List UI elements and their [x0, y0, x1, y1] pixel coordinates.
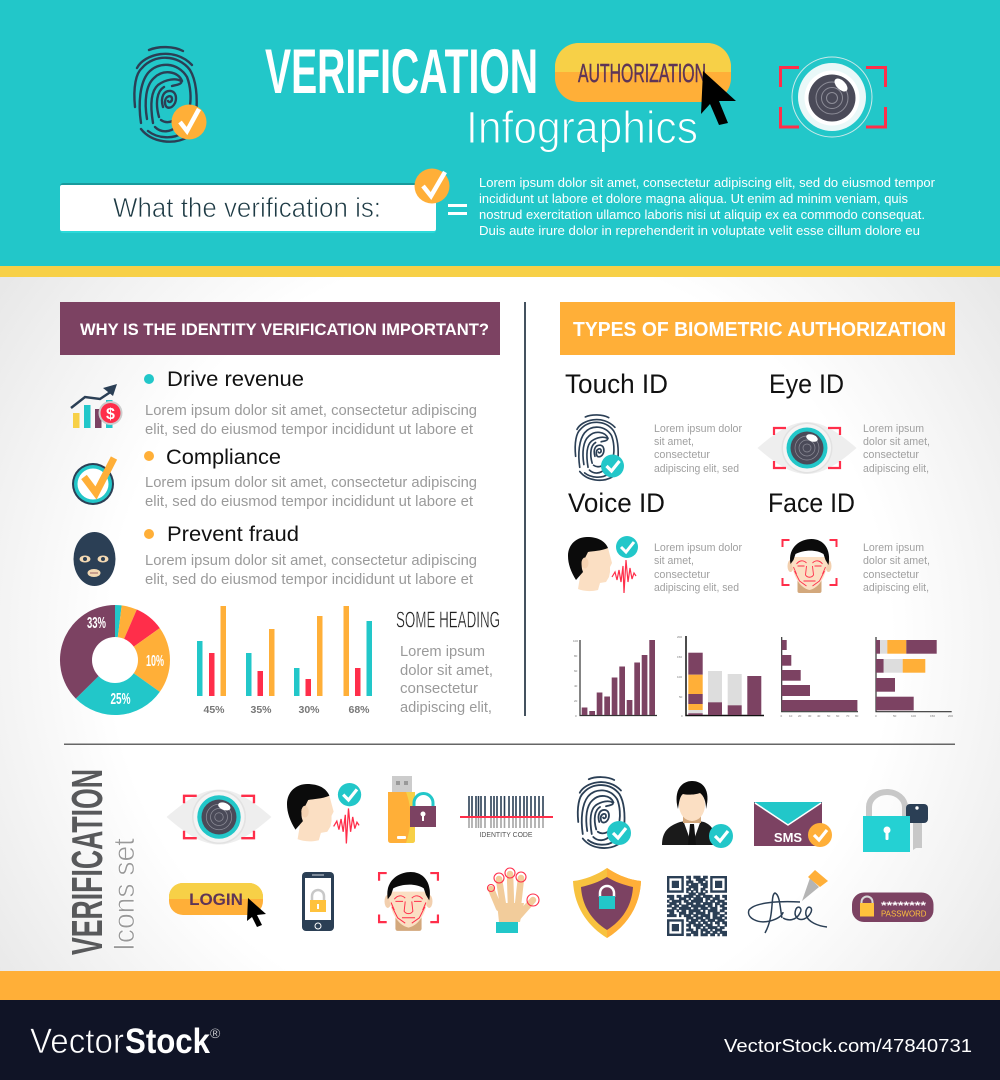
what the verification is box: What the verification is: [113, 192, 381, 223]
item: compliance: elit, sed do eiusmod tempor incididunt ut labore et [145, 493, 474, 510]
item: compliance [144, 446, 477, 510]
biometric: face id: consectetur [863, 569, 919, 581]
footer logo [30, 1022, 221, 1061]
chart: vertical bars: 80 [574, 654, 578, 658]
icon: face scan [379, 872, 438, 931]
grouped bar chart: 30% [298, 704, 320, 716]
heading: types of biometric authorization [560, 302, 955, 355]
header description text: nostrud exercitation ullamco laboris nisi ut aliquip ex ea commodo consequat. [479, 208, 925, 222]
icon: padlock with key [863, 792, 928, 852]
grouped bar chart [197, 606, 372, 716]
donut chart: 10% [146, 653, 164, 670]
authorization button [555, 43, 731, 102]
item: drive revenue: elit, sed do eiusmod tempor incididunt ut labore et [145, 421, 474, 438]
donut chart [60, 605, 170, 715]
biometric: eye id: dolor sit amet, [863, 436, 930, 448]
biometric: touch id: sit amet, [654, 436, 694, 448]
chart: stacked horizontal bars: 200 [948, 714, 953, 718]
icon: header camera eye target [780, 57, 886, 137]
heading: why is identity verification important [60, 302, 500, 355]
chart: stacked horizontal bars: 0 [875, 714, 877, 718]
footer logo: ® [210, 1025, 221, 1041]
subtitle: infographics: Infographics [466, 102, 698, 153]
chart: horizontal bars: 30 [808, 714, 812, 718]
icon: usb key with padlock [388, 776, 436, 843]
item: prevent fraud: Lorem ipsum dolor sit amet, consectetur adipiscing [145, 552, 477, 569]
chart: stacked horizontal bars: 100 [911, 714, 916, 718]
icon: qr code [667, 876, 727, 936]
footer logo: Vector [30, 1022, 124, 1061]
biometric: face id: dolor sit amet, [863, 555, 930, 567]
chart: stacked horizontal bars [875, 637, 953, 718]
chart: vertical bars: 100 [573, 639, 578, 643]
authorization button: AUTHORIZATION [578, 58, 706, 88]
some heading text block: Lorem ipsum [400, 643, 485, 660]
chart: stacked columns: 150 [677, 655, 682, 659]
chart: horizontal bars: 70 [846, 714, 850, 718]
grouped bar chart: 35% [250, 704, 272, 716]
chart: horizontal bars: 80 [855, 714, 859, 718]
what the verification is box [60, 168, 450, 233]
heading: types of biometric authorization: TYPES OF BIOMETRIC AUTHORIZATION [573, 319, 946, 341]
title: verification: VERIFICATION [265, 37, 538, 107]
chart: stacked horizontal bars: 50 [893, 714, 897, 718]
item: compliance: Compliance [166, 446, 281, 469]
chart: stacked columns: 50 [679, 695, 683, 699]
biometric: touch id [565, 369, 742, 480]
icon: voice recognition head [287, 783, 361, 843]
icon: compliance check [72, 458, 114, 505]
icon: password pill: ******** [881, 900, 927, 912]
some heading text block: dolor sit amet, [400, 662, 493, 679]
item: compliance: Lorem ipsum dolor sit amet, consectetur adipiscing [145, 474, 477, 491]
header description text [479, 176, 935, 238]
chart: horizontal bars: 60 [836, 714, 840, 718]
icon: hand with fingertip marks [488, 868, 539, 933]
heading: why is identity verification important: WHY IS THE IDENTITY VERIFICATION IMPORTANT? [80, 320, 489, 339]
icon: sms envelope: SMS [774, 830, 802, 845]
icons set vertical title: VERIFICATION [63, 769, 112, 955]
biometric: eye id [758, 369, 930, 475]
icon: password pill: PASSWORD [881, 908, 926, 918]
biometric: eye id: adipiscing elit, [863, 463, 929, 475]
header description text: incididunt ut labore et dolore magna aliqua. Ut enim ad minim veniam, quis [479, 192, 908, 206]
item: drive revenue: Lorem ipsum dolor sit amet, consectetur adipiscing [145, 402, 477, 419]
item: prevent fraud [144, 523, 477, 588]
chart: vertical bars: 20 [574, 699, 578, 703]
item: prevent fraud: elit, sed do eiusmod tempor incididunt ut labore et [145, 571, 474, 588]
biometric: face id: Lorem ipsum [863, 542, 924, 554]
biometric: voice id: sit amet, [654, 555, 694, 567]
donut chart: 33% [87, 615, 106, 632]
header band [0, 0, 1000, 277]
chart: horizontal bars: 20 [798, 714, 802, 718]
chart: horizontal bars: 50 [827, 714, 831, 718]
biometric: voice id: adipiscing elit, sed [654, 582, 739, 594]
icon: shield with lock [573, 868, 641, 938]
icon: pen signature [749, 870, 828, 933]
icon: revenue chart with coin [71, 384, 122, 428]
footer bands [0, 971, 1000, 1080]
biometric: eye id: Eye ID [769, 369, 844, 399]
footer image reference: VectorStock.com/47840731 [724, 1036, 972, 1056]
icon: login button [169, 883, 266, 927]
biometric: face id [768, 488, 930, 594]
icon: login button: LOGIN [189, 890, 243, 909]
chart: vertical bars [573, 639, 657, 718]
biometric: voice id: consectetur [654, 569, 710, 581]
icon: fingerprint with check [578, 777, 631, 848]
icon: header fingerprint with check [134, 47, 206, 142]
icon: identity barcode [460, 796, 553, 839]
biometric: touch id: consectetur [654, 449, 710, 461]
icons set vertical title [63, 769, 141, 955]
header description text: Duis aute irure dolor in reprehenderit in voluptate velit esse cillum dolore eu [479, 224, 920, 238]
header description text: Lorem ipsum dolor sit amet, consectetur adipiscing elit, sed do eiusmod tempor [479, 176, 935, 190]
item: drive revenue [144, 368, 477, 438]
chart: stacked columns: 100 [677, 675, 682, 679]
chart: horizontal bars: 10 [789, 714, 793, 718]
icon: cursor arrow [701, 71, 736, 125]
biometric: touch id: Lorem ipsum dolor [654, 423, 742, 435]
chart: stacked columns: 200 [677, 635, 682, 639]
equals sign [448, 206, 467, 214]
biometric: touch id: Touch ID [565, 369, 668, 399]
chart: vertical bars: 40 [574, 684, 578, 688]
chart: stacked horizontal bars: 150 [930, 714, 935, 718]
icon: balaclava mask [74, 532, 116, 586]
biometric: eye id: Lorem ipsum [863, 423, 924, 435]
chart: stacked columns: 0 [681, 714, 683, 718]
icons set vertical title: Icons set [108, 837, 141, 951]
chart: horizontal bars [780, 637, 859, 718]
chart: stacked columns [677, 635, 764, 718]
icon: businessman with check [662, 781, 733, 848]
donut chart: 25% [110, 691, 130, 708]
icon: password pill [852, 892, 934, 922]
biometric: touch id: adipiscing elit, sed [654, 463, 739, 475]
biometric: face id: Face ID [768, 488, 855, 518]
biometric: eye id: consectetur [863, 449, 919, 461]
icon: identity barcode: IDENTITY CODE [480, 830, 532, 839]
biometric: face id: adipiscing elit, [863, 582, 929, 594]
icon: eye scan [167, 789, 271, 845]
some heading text block: consectetur [400, 680, 478, 697]
biometric: voice id: Lorem ipsum dolor [654, 542, 742, 554]
footer logo: Stock [125, 1022, 210, 1061]
biometric: voice id [568, 488, 742, 594]
some heading text block: SOME HEADING [396, 606, 500, 632]
grouped bar chart: 45% [203, 704, 225, 716]
biometric: voice id: Voice ID [568, 488, 665, 518]
icon: revenue chart with coin: $ [106, 406, 115, 423]
some heading text block: adipiscing elit, [400, 699, 492, 716]
chart: horizontal bars: 0 [780, 714, 782, 718]
grouped bar chart: 68% [348, 704, 370, 716]
chart: vertical bars: 60 [574, 669, 578, 673]
icon: smartphone with lock [302, 872, 334, 931]
icon: sms envelope [754, 802, 832, 847]
item: prevent fraud: Prevent fraud [167, 523, 299, 546]
item: drive revenue: Drive revenue [167, 368, 304, 391]
chart: vertical bars: 0 [575, 714, 577, 718]
some heading text block [396, 606, 500, 716]
chart: horizontal bars: 40 [817, 714, 821, 718]
